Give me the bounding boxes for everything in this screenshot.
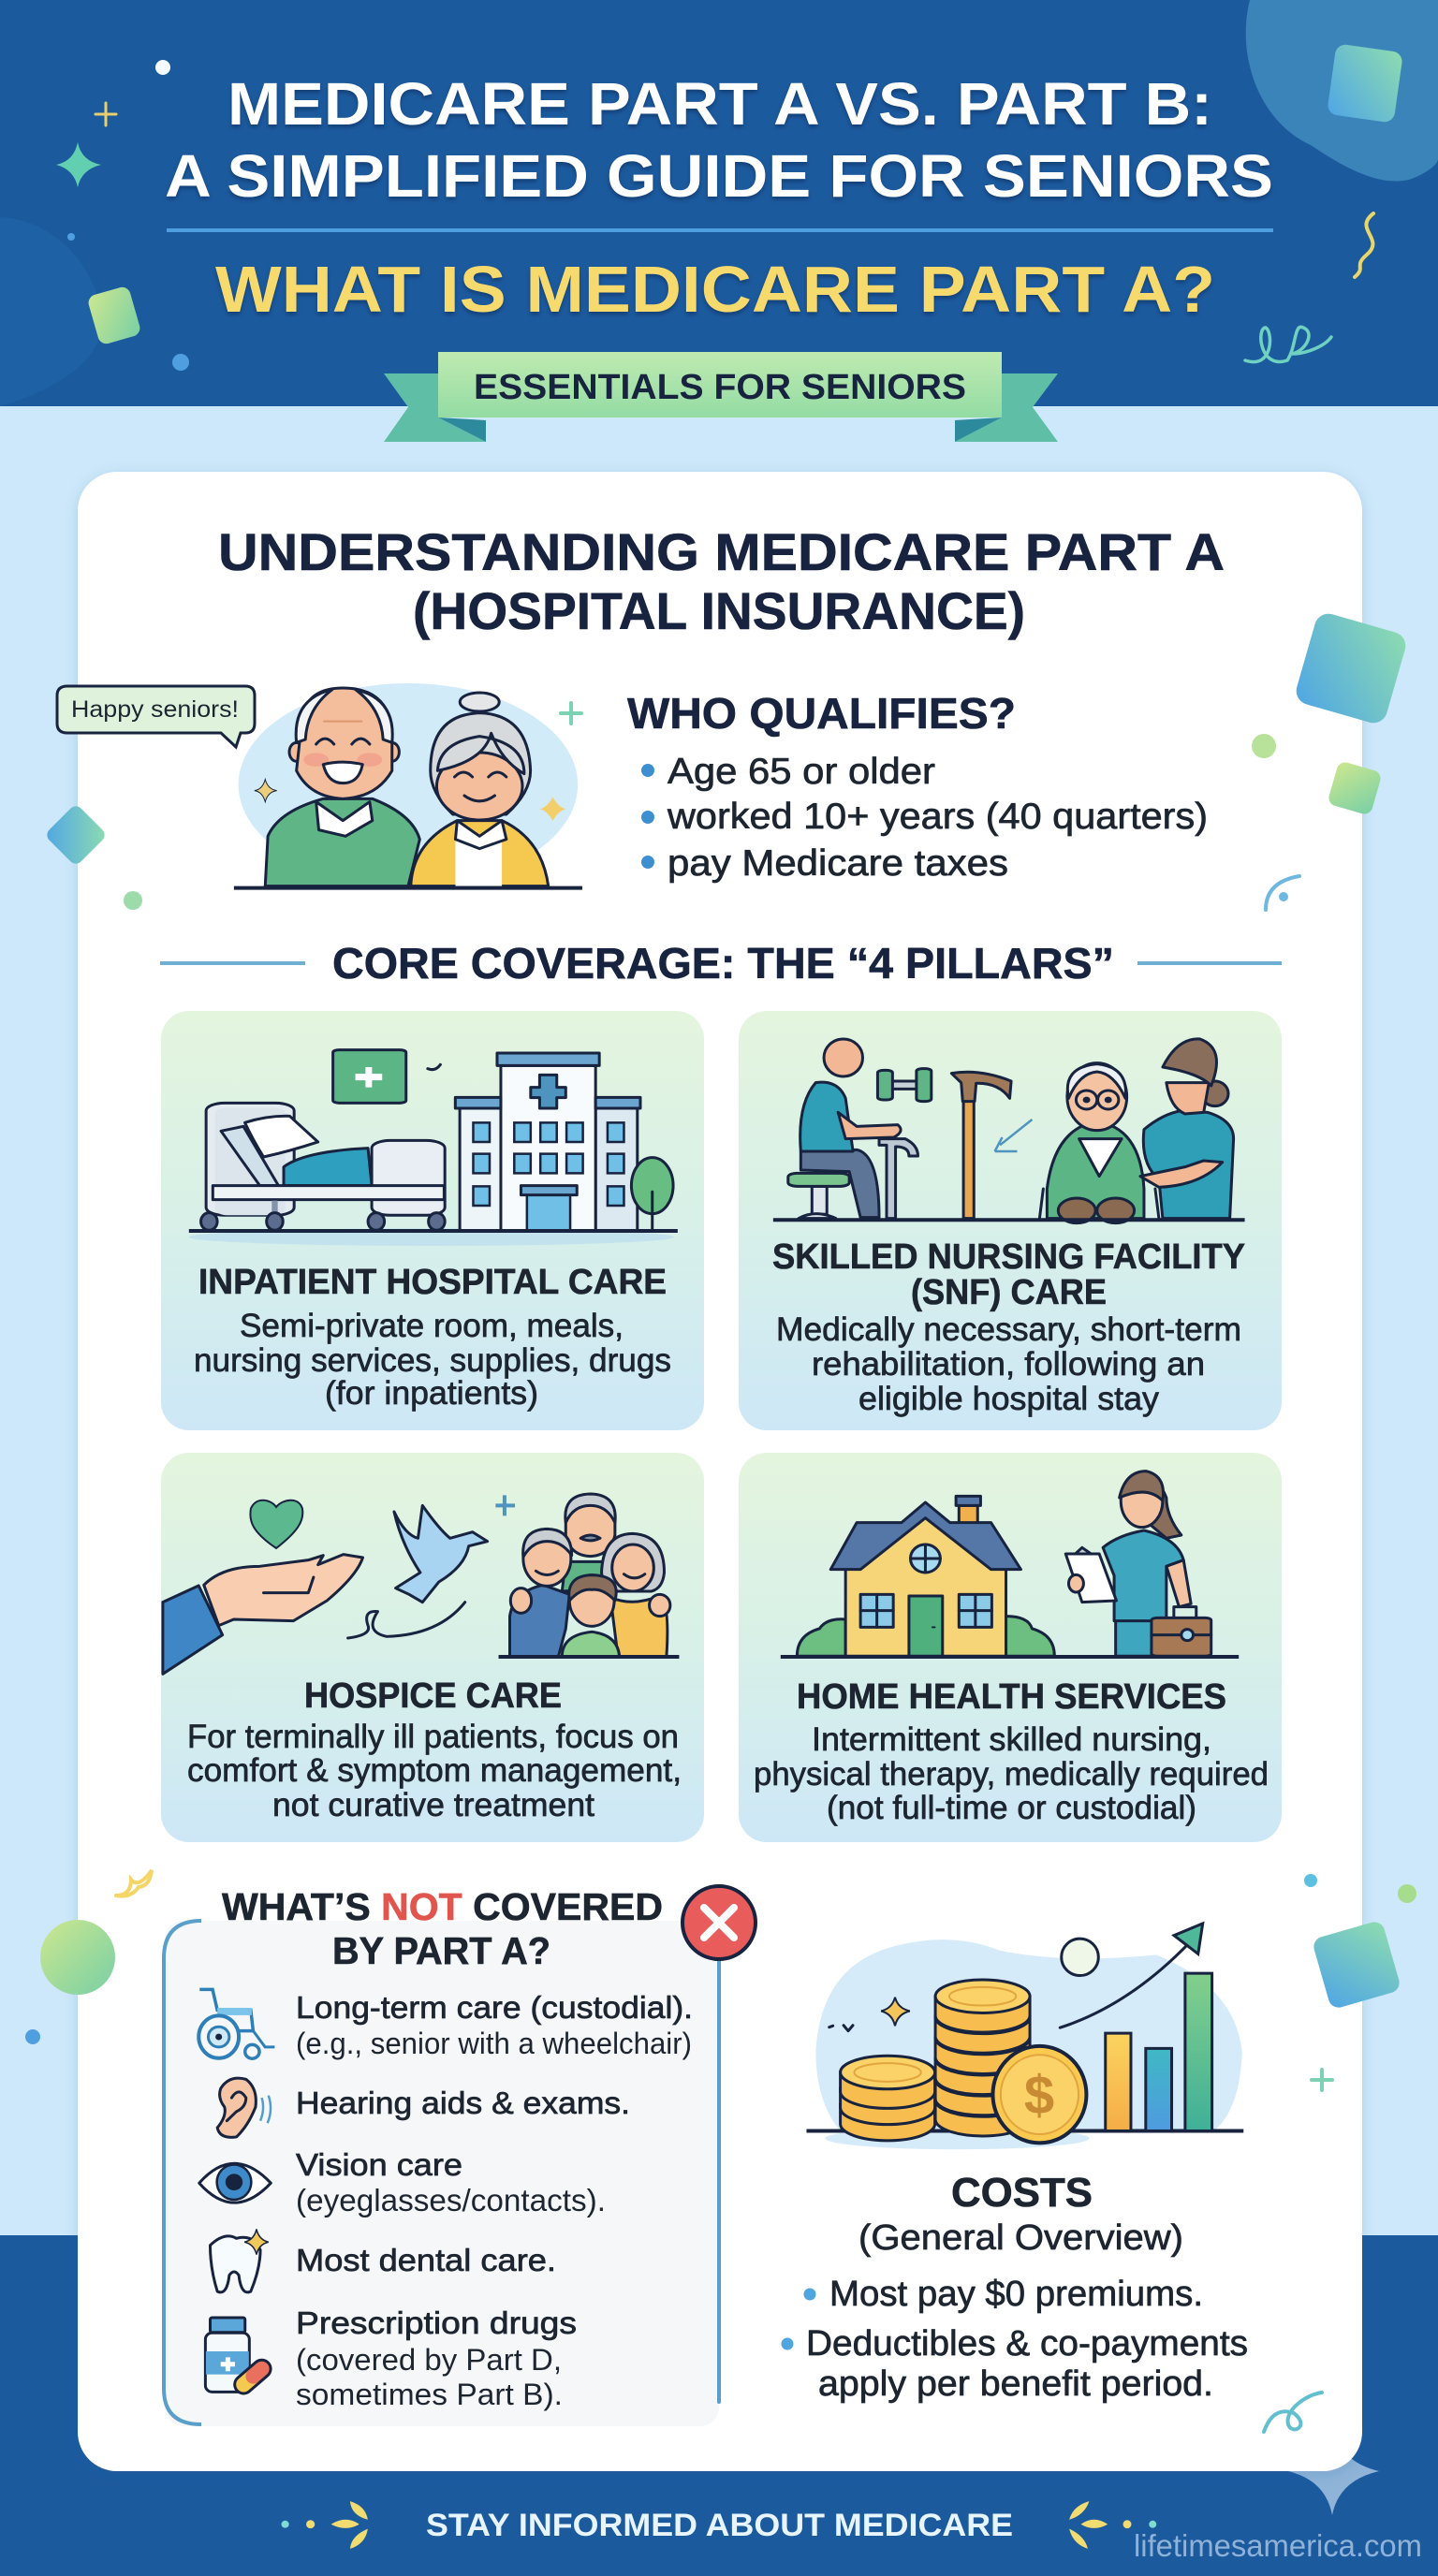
item: prescription drugs: (covered by Part D, [296,2343,562,2377]
panel: inpatient hospital care [161,1011,704,1430]
illustration: hospital bed and building [189,1050,678,1246]
pillar heading: SKILLED NURSING FACILITY [772,1237,1245,1277]
pillar description: comfort & symptom management, [187,1752,682,1789]
panel: hospice care [161,1453,704,1842]
ribbon label: ESSENTIALS FOR SENIORS [474,368,966,407]
woman [411,693,549,886]
item: prescription drugs: sometimes Part B). [296,2378,563,2411]
item: long-term care [296,1990,693,2060]
panel: costs [781,1924,1248,2404]
illustration: coins and bar chart [806,1924,1243,2149]
who qualifies: WHO QUALIFIES? [627,689,1016,738]
pillar description: For terminally ill patients, focus on [187,1719,679,1755]
title: MEDICARE PART A VS. PART B: [227,70,1212,138]
pillar heading: INPATIENT HOSPITAL CARE [198,1263,667,1302]
section heading: core coverage: CORE COVERAGE: THE “4 PILLARS” [332,939,1114,988]
heading: not covered: WHAT’S NOT COVERED [222,1885,663,1928]
pillar description [754,1721,1269,1826]
heading: costs [858,2170,1183,2258]
pillar description: nursing services, supplies, drugs [194,1342,671,1379]
item: prescription drugs [296,2305,577,2411]
pillar description: rehabilitation, following an [812,1346,1205,1383]
qualification list [641,752,1208,884]
pillar description: eligible hospital stay [858,1381,1160,1417]
callout: Happy seniors [57,686,255,747]
heading: costs: COSTS [951,2170,1093,2216]
coin dollar sign: $ [1024,2065,1054,2126]
pillar description: (for inpatients) [325,1375,538,1412]
item: long-term care: Long-term care (custodial). [296,1990,693,2025]
ribbon banner [384,352,1058,442]
footer ornament right [1069,2501,1156,2549]
heading: not covered [222,1885,663,1972]
title divider [167,228,1273,232]
pillar description: Medically necessary, short-term [776,1311,1241,1348]
pillar heading: (SNF) CARE [911,1273,1107,1312]
main white card [78,472,1362,2471]
card heading: UNDERSTANDING MEDICARE PART A [218,522,1225,581]
costs list [781,2275,1248,2404]
panel: home health services [739,1453,1282,1842]
footer band [0,2235,1438,2576]
footer star [1288,2424,1379,2515]
section heading: core coverage [160,939,1282,988]
qualification list: worked 10+ years (40 quarters) [667,797,1208,837]
item: hearing: Hearing aids & exams. [296,2086,630,2120]
qualification list: pay Medicare taxes [668,843,1008,884]
illustration: house and nurse [781,1471,1239,1657]
pillar description [187,1719,682,1823]
illustration: hand, dove and family [163,1494,679,1674]
pillar description: Semi-private room, meals, [240,1308,624,1344]
item: prescription drugs: Prescription drugs [296,2305,577,2340]
subtitle: WHAT IS MEDICARE PART A? [215,253,1215,326]
item: long-term care: (e.g., senior with a wheelchair) [296,2027,692,2060]
who qualifies [627,689,1208,884]
icon: wheelchair [198,1989,274,2058]
card heading [218,522,1225,640]
side decorations, upper [44,610,1409,910]
illustration: rehabilitation therapy [773,1039,1245,1223]
side decorations, lower [25,1870,1416,2432]
icon: red cross [682,1886,756,1959]
pillar heading [772,1237,1245,1312]
qualification list: Age 65 or older [668,752,935,792]
panel: skilled nursing facility [739,1011,1282,1430]
pillar heading: HOME HEALTH SERVICES [797,1677,1226,1717]
title [165,70,1273,210]
icon: tooth [210,2229,269,2292]
header decorations [56,43,1403,371]
costs list: Deductibles & co-payments [806,2324,1248,2364]
panel: not covered [164,1885,756,2426]
pillar description: not curative treatment [272,1787,594,1823]
icon: eye [199,2163,271,2203]
illustration: happy seniors [234,683,582,888]
footer ornament left [282,2501,368,2549]
item: vision: Vision care [296,2147,462,2182]
card heading: (HOSPITAL INSURANCE) [413,581,1025,640]
footer text: STAY INFORMED ABOUT MEDICARE [426,2508,1013,2543]
watermark: lifetimesamerica.com [1134,2528,1422,2563]
pillar description [194,1308,671,1412]
pillar description [776,1311,1241,1417]
footer strip [282,2501,1156,2549]
callout: Happy seniors: Happy seniors! [71,696,239,723]
title: A SIMPLIFIED GUIDE FOR SENIORS [165,142,1273,210]
pillar description: physical therapy, medically required [754,1756,1269,1793]
icon: ear [217,2078,271,2137]
item: vision [296,2147,606,2217]
costs list: Most pay $0 premiums. [829,2275,1203,2314]
man [265,688,419,886]
pillar description: Intermittent skilled nursing, [812,1721,1211,1758]
pillar heading: HOSPICE CARE [304,1676,562,1716]
header band [0,0,1438,406]
heading: costs: (General Overview) [858,2218,1183,2258]
costs list: apply per benefit period. [818,2364,1213,2404]
pillar description: (not full-time or custodial) [827,1790,1196,1826]
item: dental: Most dental care. [296,2243,556,2277]
heading: not covered: BY PART A? [332,1929,550,1972]
item: vision: (eyeglasses/contacts). [296,2183,606,2217]
icon: pill bottle [205,2318,262,2392]
